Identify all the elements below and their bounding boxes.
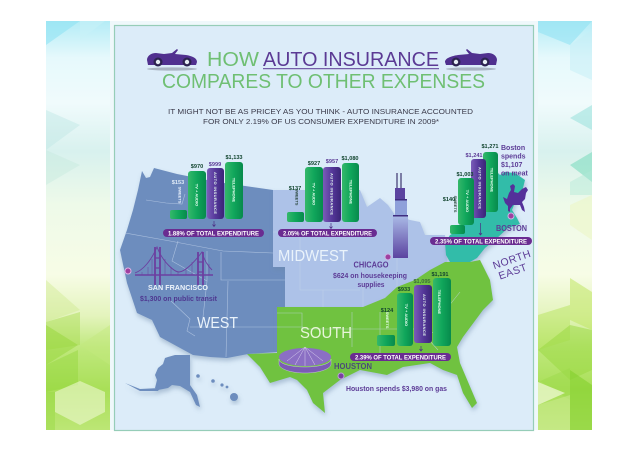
text: san francisco: SAN FRANCISCO (148, 285, 209, 292)
callout: northeast expenditure: 2.35% OF TOTAL EXPENDITURE (435, 238, 528, 245)
callout: west expenditure: 1.88% OF TOTAL EXPENDITURE (168, 230, 260, 237)
title: HOW (207, 48, 260, 71)
left patterned sidebar (46, 21, 110, 430)
marker: houston (338, 373, 344, 379)
chart: northeast bars: $1,241 (465, 153, 483, 159)
region label: northeast: EAST (497, 262, 529, 282)
text: chicago: CHICAGO (354, 260, 388, 270)
chart: west bars: $1,133 (225, 155, 243, 161)
marker: san francisco (125, 268, 131, 274)
chart: west bars: TELEPHONE (232, 178, 236, 203)
chart: south bars: SWEETS (385, 312, 390, 329)
icon: golden gate bridge (135, 247, 213, 285)
right patterned sidebar (538, 21, 592, 430)
chart: midwest bars: SWEETS (294, 189, 300, 206)
region labels: SOUTH (300, 325, 352, 342)
subtitle (168, 107, 474, 126)
chart: south bars: $1,095 (413, 279, 431, 285)
chart: south bars: TELEPHONE (437, 290, 442, 315)
chart: south bars: $1,191 (431, 272, 449, 278)
text: houston (334, 362, 447, 393)
chart: northeast bars: $1,003 (456, 172, 474, 178)
chart: south bars (377, 272, 451, 351)
text: boston: Boston (501, 145, 525, 152)
map of the United States (120, 165, 525, 413)
title: COMPARES TO OTHER EXPENSES (162, 70, 485, 93)
chart: midwest bars: AUTO INSURANCE (330, 173, 334, 215)
chart: south bars: $124 (381, 308, 394, 314)
text: boston (496, 145, 529, 233)
text: boston: BOSTON (496, 224, 527, 233)
chart: south bars: $933 (398, 287, 410, 293)
text: boston: spends (501, 154, 526, 160)
callout: south expenditure: 2.39% OF TOTAL EXPENDITURE (355, 354, 447, 361)
text: chicago: $624 on housekeeping (333, 273, 407, 280)
region labels (197, 248, 352, 342)
state lines (125, 194, 460, 357)
chart: west bars: SWEETS (178, 187, 182, 204)
chart: west bars: TV + AUDIO (194, 184, 200, 206)
region: west (120, 168, 285, 358)
chart: midwest bars: TV + AUDIO (312, 183, 316, 205)
marker: chicago (385, 254, 391, 260)
text: boston: on meat (501, 170, 529, 178)
text: chicago (333, 260, 407, 289)
title: AUTO INSURANCE (263, 48, 439, 71)
chart: west bars: $153 (172, 180, 184, 186)
marker: boston (508, 213, 514, 219)
text: houston: HOUSTON (334, 362, 372, 371)
region: alaska (125, 355, 200, 407)
chart: west bars: $999 (209, 162, 221, 168)
text: chicago: supplies (358, 282, 385, 289)
chart: south bars: AUTO INSURANCE (422, 294, 427, 336)
text: houston: Houston spends $3,980 on gas (346, 386, 447, 393)
chart: west bars: AUTO INSURANCE (213, 172, 218, 214)
chart: west bars: $970 (191, 164, 203, 170)
region: northeast (445, 165, 525, 262)
region: hawaii (196, 374, 238, 401)
icon: willis tower (393, 173, 408, 258)
main panel (114, 26, 534, 430)
chart: northeast bars: SWEETS (453, 196, 458, 213)
region: south (247, 260, 493, 413)
subtitle: FOR ONLY 2.19% OF US CONSUMER EXPENDITURE IN 2009* (203, 117, 439, 126)
text: san francisco (140, 285, 218, 303)
chart: northeast bars: AUTO INSURANCE (478, 167, 482, 209)
chart: midwest bars: $1,080 (341, 156, 359, 162)
region labels: MIDWEST (278, 248, 348, 265)
chart: south bars: TV + AUDIO (404, 304, 409, 326)
region label: northeast: NORTH (491, 248, 533, 272)
region labels: WEST (197, 315, 238, 332)
icon: boston horse statue (503, 184, 528, 212)
subtitle: IT MIGHT NOT BE AS PRICEY AS YOU THINK - AUTO INSURANCE ACCOUNTED (168, 107, 474, 116)
text: san francisco: $1,300 on public transit (140, 296, 218, 303)
icon: left car (147, 49, 197, 71)
chart: midwest bars: $957 (326, 159, 338, 165)
chart: northeast bars: TELEPHONE (490, 168, 494, 193)
region: midwest (273, 190, 447, 307)
icon: houston astrodome (279, 347, 331, 373)
chart: northeast bars: $140 (443, 197, 455, 203)
chart: midwest bars: $137 (289, 186, 301, 192)
chart: northeast bars: $1,271 (481, 144, 499, 150)
chart: midwest bars: TELEPHONE (348, 180, 354, 205)
text: boston: $1,107 (501, 162, 523, 169)
chart: west bars (170, 155, 243, 226)
chart: midwest bars: $927 (308, 161, 320, 167)
chart: northeast bars (443, 144, 499, 235)
chart: midwest bars (287, 156, 359, 228)
page backdrop (46, 21, 592, 430)
title (162, 48, 485, 93)
chart: northeast bars: TV + AUDIO (465, 190, 470, 212)
callout: midwest expenditure: 2.05% OF TOTAL EXPENDITURE (283, 230, 373, 237)
icon: right car (445, 49, 497, 71)
